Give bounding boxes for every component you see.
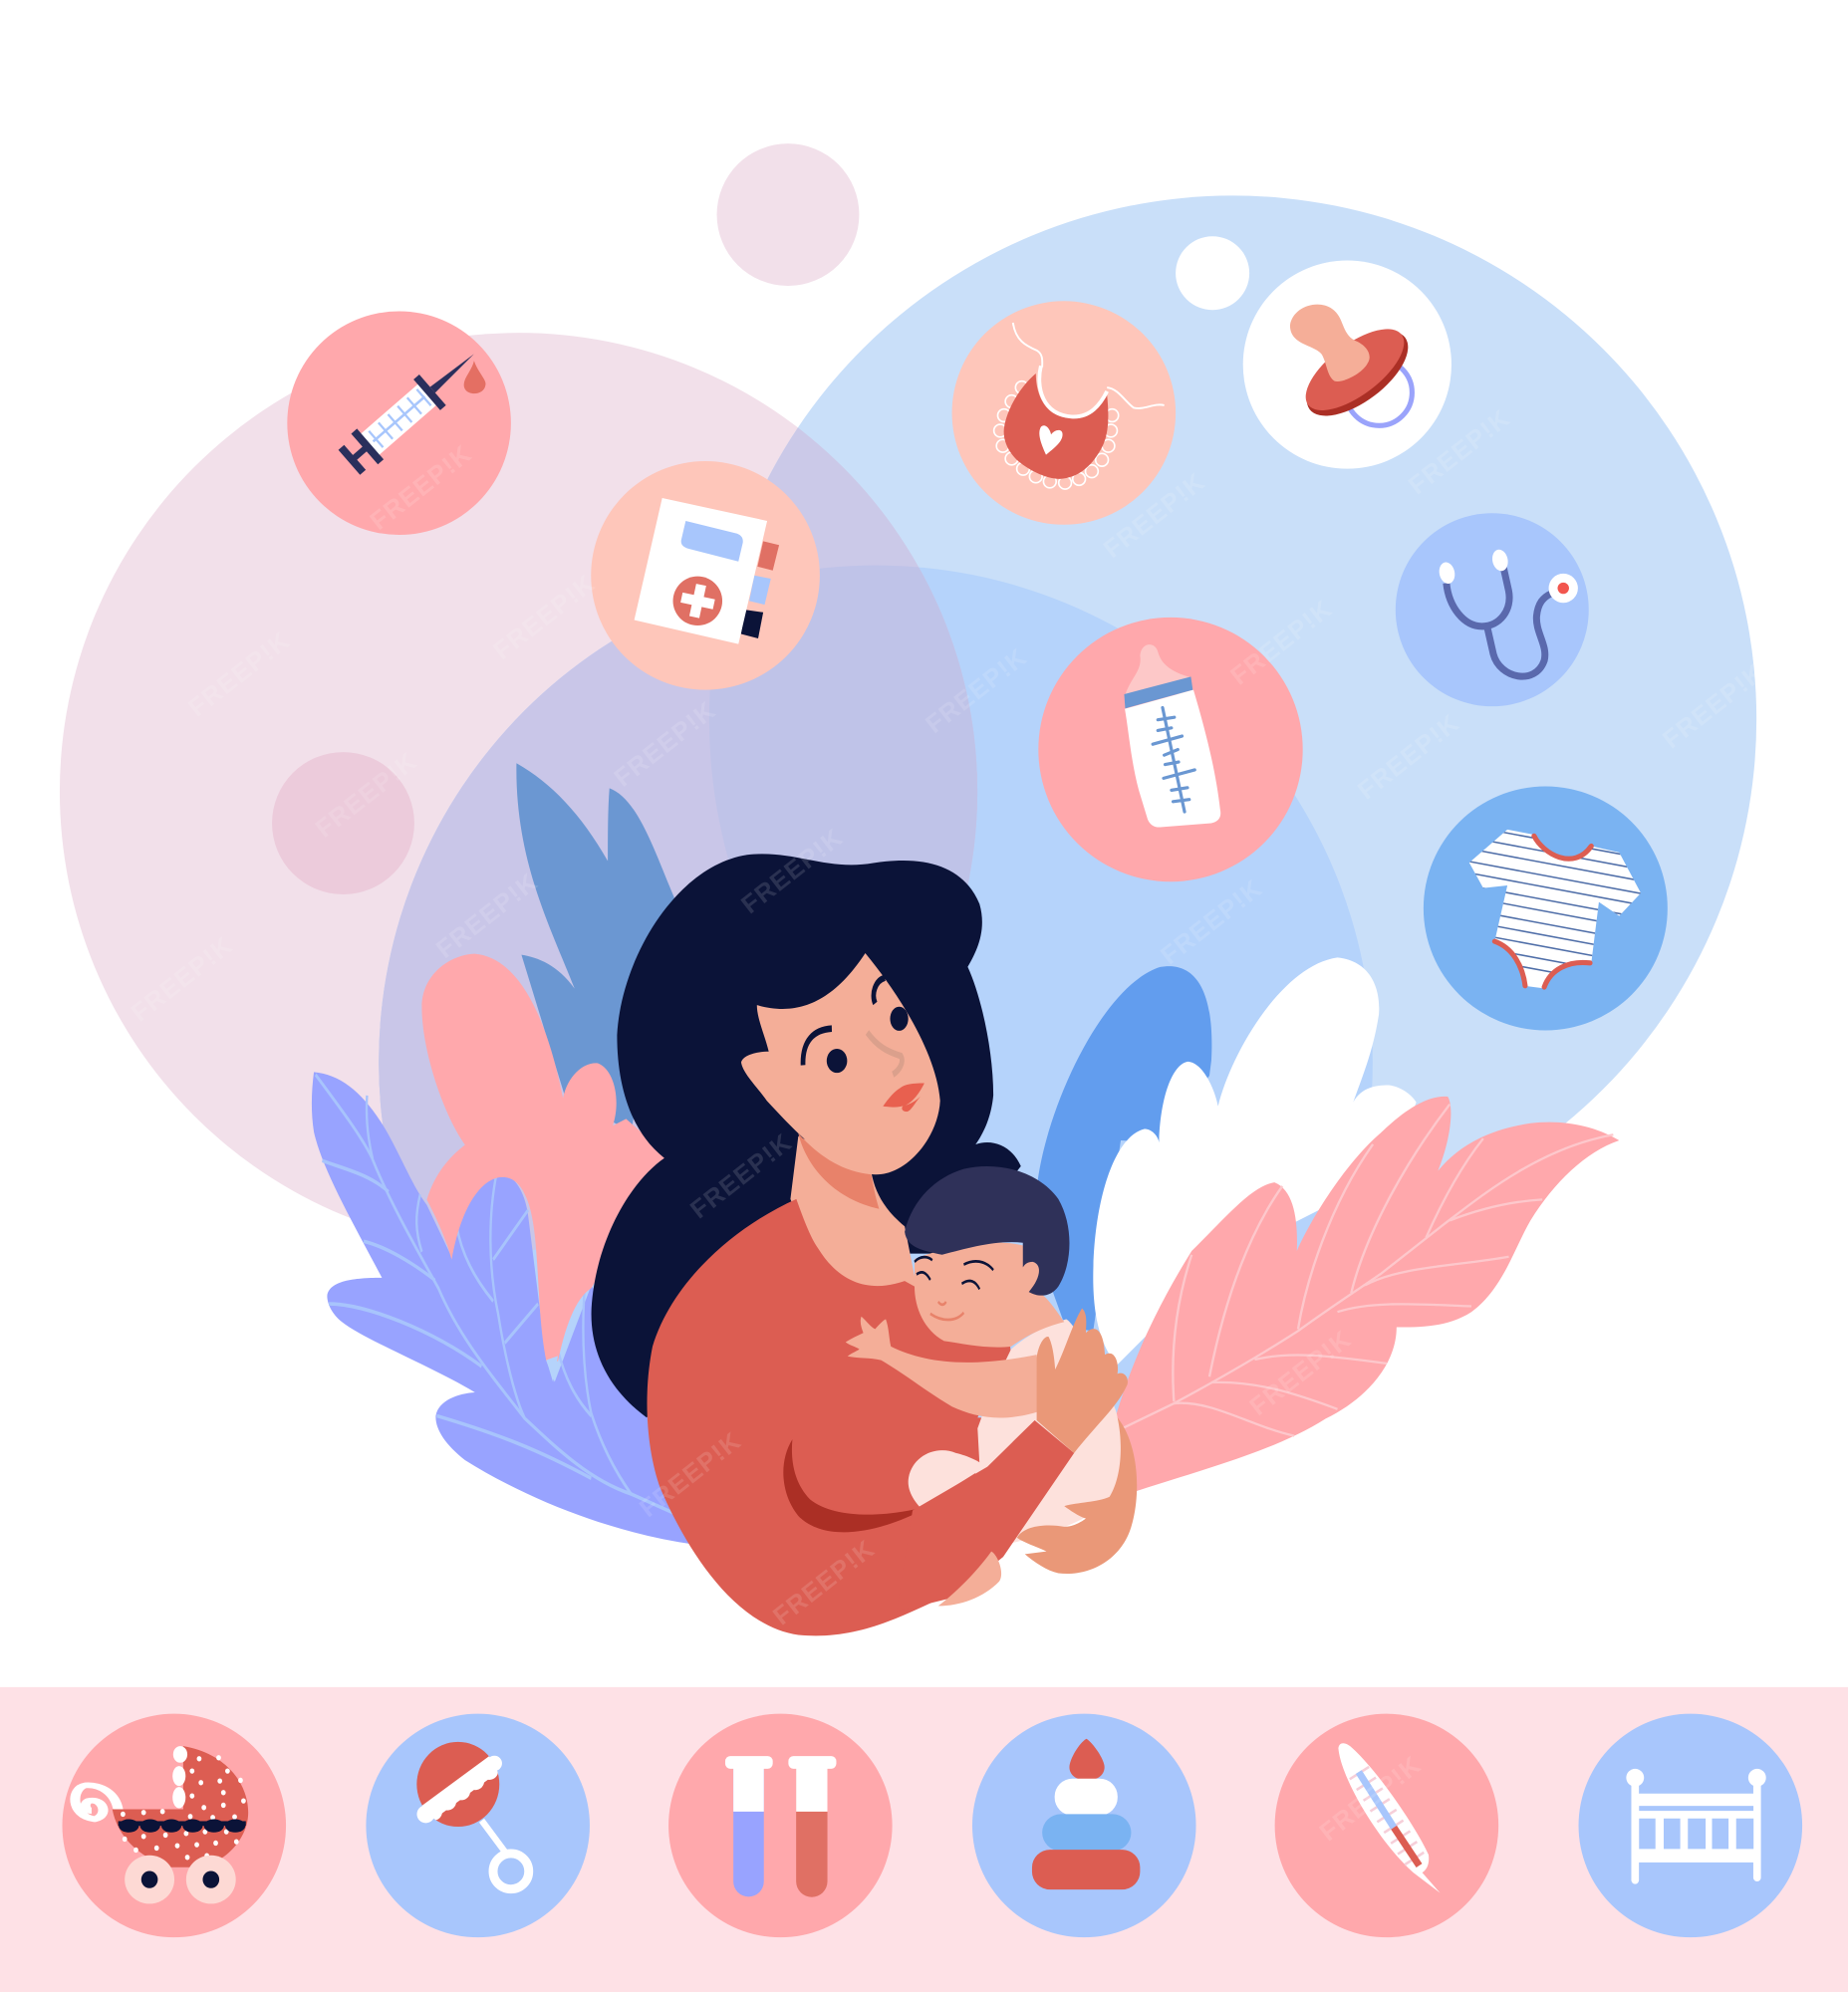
watermarks: FREEP!K	[685, 1128, 798, 1224]
watermarks: FREEP!K	[431, 868, 543, 964]
mother forearm tip	[938, 1552, 1001, 1606]
watermarks: FREEP!K	[768, 1535, 881, 1630]
figure: mother holding baby	[592, 854, 1137, 1635]
watermarks: FREEP!K	[1315, 1751, 1427, 1847]
icon: pacifier	[1243, 260, 1452, 469]
mother face	[741, 953, 940, 1174]
foliage: white leaf right	[1093, 957, 1417, 1366]
icon: medical record book	[591, 461, 820, 690]
background circle: large light blue	[709, 195, 1756, 1242]
watermarks: FREEP!K	[1244, 1325, 1357, 1421]
mother arm	[897, 1420, 1074, 1612]
watermarks: FREEP!K	[1404, 404, 1515, 500]
baby face	[915, 1243, 1064, 1348]
watermarks: FREEP!K	[127, 931, 238, 1028]
baby hair	[905, 1166, 1069, 1296]
watermarks: FREEP!K	[610, 696, 721, 793]
foliage: pink leaf left	[421, 954, 670, 1381]
watermarks: FREEP!K	[311, 747, 422, 844]
watermarks: FREEP!K	[183, 626, 296, 722]
background circle: pink	[60, 333, 977, 1250]
watermarks: FREEP!K	[736, 824, 849, 919]
mother upper hand	[1037, 1309, 1128, 1453]
icon: pram	[63, 1714, 286, 1937]
foliage: pink leaf right	[1105, 1097, 1619, 1491]
foliage: medium blue leaf right	[1038, 966, 1211, 1331]
watermarks	[127, 404, 1770, 1847]
icon: crib	[1579, 1714, 1802, 1937]
icon: stethoscope	[1396, 513, 1589, 706]
small circle: white	[1176, 236, 1249, 310]
mother neck	[790, 1136, 917, 1298]
bottom band	[0, 1687, 1848, 1992]
icon: thermometer	[1275, 1714, 1498, 1937]
foliage: blue leaf behind the woman	[516, 763, 674, 1131]
icon: syringe	[287, 311, 511, 535]
mother sweater	[647, 1199, 1074, 1635]
watermarks: FREEP!K	[1353, 709, 1464, 805]
watermarks: FREEP!K	[1156, 874, 1268, 970]
watermarks: FREEP!K	[1225, 595, 1338, 691]
icon: striped onesie	[1424, 787, 1668, 1030]
baby thigh	[909, 1450, 985, 1508]
watermarks: FREEP!K	[366, 439, 477, 536]
watermarks: FREEP!K	[635, 1427, 747, 1523]
mother lower hand	[1017, 1417, 1137, 1574]
icon: stacking toy	[972, 1714, 1196, 1937]
small circle: pale pink top	[717, 143, 859, 286]
neck shadow	[798, 1133, 879, 1209]
baby arm	[846, 1317, 1041, 1417]
watermarks: FREEP!K	[1099, 467, 1210, 564]
small circle: rose left	[272, 752, 414, 894]
watermarks: FREEP!K	[1658, 658, 1770, 754]
background circle: medium blue	[379, 566, 1373, 1559]
circle overlaps	[379, 428, 977, 1250]
watermarks: FREEP!K	[921, 643, 1033, 739]
icon: baby bottle	[1038, 618, 1303, 881]
mother hair	[592, 854, 1021, 1417]
icon: bib	[952, 301, 1176, 525]
baby onesie	[952, 1319, 1132, 1543]
icon: test tubes	[668, 1714, 893, 1937]
icon: rattle	[366, 1714, 590, 1937]
foliage: periwinkle leaf	[312, 1072, 694, 1545]
sweater fold shadow	[783, 1439, 932, 1532]
watermarks: FREEP!K	[488, 570, 601, 665]
